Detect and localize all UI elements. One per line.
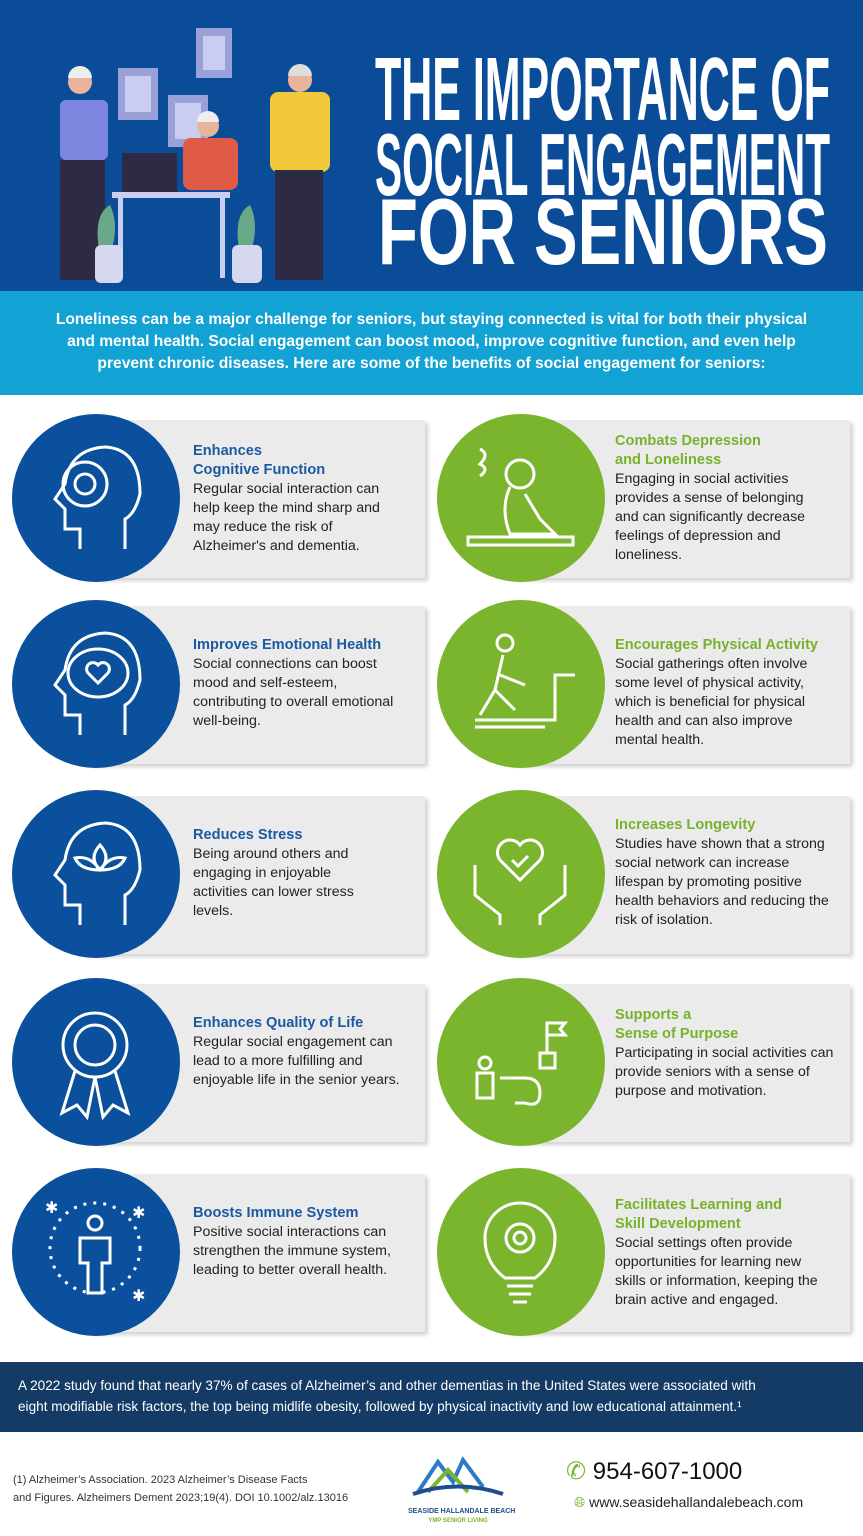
callout: study statistic: eight modifiable risk factors, the top being midlife obesity, followed by physical inactivity and low educational attainment.¹ [18, 1399, 742, 1414]
card: longevity [437, 790, 855, 959]
intro band [0, 291, 863, 395]
icon: person with shield: ✱ [45, 1200, 58, 1217]
contact: phone: ✆ 954-607-1000 [566, 1458, 742, 1485]
card: learning [437, 1168, 855, 1337]
card: cognitive [12, 414, 430, 583]
card: emotional [12, 600, 430, 769]
footnote [13, 1474, 348, 1504]
card: purpose [437, 978, 855, 1147]
footnote: (1) Alzheimer’s Association. 2023 Alzheimer’s Disease Facts [13, 1474, 308, 1486]
logo: SEASIDE HALLANDALE BEACH [408, 1508, 515, 1515]
card: longevity: Studies have shown that a strong social network can increase lifespan by promoting positive health behaviors and reducing the risk of isolation. [615, 836, 829, 928]
icon: gear head [53, 446, 142, 549]
card: quality: Regular social engagement can lead to a more fulfilling and enjoyable life in the senior years. [193, 1034, 400, 1088]
icon: brain heart head [53, 632, 142, 735]
card: learning: Facilitates Learning and [615, 1197, 782, 1213]
card: learning: Social settings often provide opportunities for learning new skills or information, keeping the brain active and engaged. [615, 1235, 818, 1308]
icon: person with shield: ✱ [132, 1288, 145, 1305]
card: quality [12, 978, 430, 1147]
card: cognitive: Regular social interaction can help keep the mind sharp and may reduce the risk of Alzheimer's and dementia. [193, 481, 380, 554]
card: cognitive: Cognitive Function [193, 462, 325, 478]
callout: study statistic: A 2022 study found that nearly 37% of cases of Alzheimer’s and other dementias in the United States were associated with [18, 1378, 756, 1393]
intro band: Loneliness can be a major challenge for seniors, but staying connected is vital for both their physical [56, 311, 807, 328]
logo [408, 1456, 515, 1524]
icon: award ribbon [60, 1012, 130, 1120]
card: emotional: Improves Emotional Health [193, 637, 381, 653]
icon: hands heart [474, 838, 566, 925]
card: learning: Skill Development [615, 1216, 741, 1232]
card: emotional: Social connections can boost mood and self-esteem, contributing to overall emotional well-being. [193, 656, 393, 729]
card: immune: Positive social interactions can strengthen the immune system, leading to better overall health. [193, 1224, 391, 1278]
card: depression: Combats Depression [615, 433, 761, 449]
card: physical [437, 600, 855, 769]
header background [0, 0, 863, 291]
card: physical: Encourages Physical Activity [615, 637, 818, 653]
icon: treadmill runner [475, 634, 575, 728]
card: purpose: Participating in social activities can provide seniors with a sense of purpose and motivation. [615, 1045, 833, 1099]
card: depression: Engaging in social activities provides a sense of belonging and can significantly decrease feelings of depression and loneliness. [615, 471, 805, 563]
card: longevity: Increases Longevity [615, 817, 755, 833]
icon: path to flag [476, 1022, 568, 1106]
logo: YMP SENIOR LIVING [428, 1518, 488, 1524]
card: purpose: Sense of Purpose [615, 1026, 738, 1042]
icon: sitting person [466, 448, 574, 546]
card: stress [12, 790, 430, 959]
card: immune [12, 1168, 430, 1337]
card: quality: Enhances Quality of Life [193, 1015, 363, 1031]
title [375, 40, 830, 284]
icon: person with shield [45, 1200, 145, 1305]
card: cognitive: Enhances [193, 443, 262, 459]
card: depression: and Loneliness [615, 452, 721, 468]
icon: leaf head [53, 822, 142, 925]
callout: study statistic [0, 1362, 863, 1432]
icon: lightbulb gear [484, 1202, 556, 1304]
panel: benefits grid [12, 414, 855, 1337]
intro band: and mental health. Social engagement can boost mood, improve cognitive function, and even help [67, 333, 796, 350]
card: purpose: Supports a [615, 1007, 691, 1023]
intro band: prevent chronic diseases. Here are some of the benefits of social engagement for seniors: [97, 355, 766, 372]
card: depression [437, 414, 855, 583]
footnote: and Figures. Alzheimers Dement 2023;19(4). DOI 10.1002/alz.13016 [13, 1492, 348, 1504]
card: physical: Social gatherings often involve some level of physical activity, which is beneficial for physical health and can also improve mental health. [615, 656, 807, 748]
icon: person with shield: ✱ [132, 1205, 145, 1222]
card: stress: Reduces Stress [193, 827, 303, 843]
card: immune: Boosts Immune System [193, 1205, 358, 1221]
contact: website: 🌐︎ www.seasidehallandalebeach.com [574, 1494, 803, 1510]
card: stress: Being around others and engaging in enjoyable activities can lower stress levels. [193, 846, 354, 919]
illustration: seniors at computer [60, 28, 330, 283]
